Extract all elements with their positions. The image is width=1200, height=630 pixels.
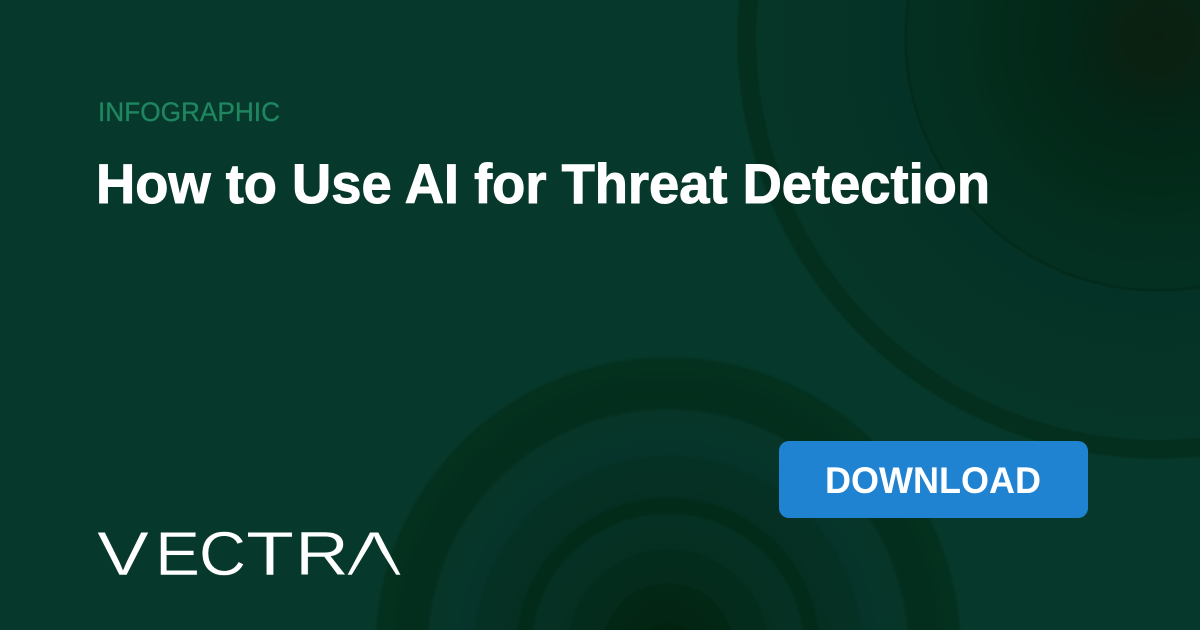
logo: Vectra: R — [295, 520, 349, 589]
decorative rings: upper right — [720, 0, 1200, 470]
eyebrow label: INFOGRAPHIC — [98, 97, 280, 127]
download button — [779, 441, 1088, 518]
logo: Vectra: A — [347, 520, 402, 589]
decorative rings: bottom center — [370, 350, 970, 630]
logo: Vectra: V — [97, 520, 150, 589]
logo: Vectra: T — [246, 520, 294, 589]
logo: Vectra — [98, 532, 401, 576]
download button: DOWNLOAD — [825, 460, 1041, 501]
logo: Vectra: E — [155, 520, 200, 589]
logo: Vectra: C — [199, 520, 246, 589]
title: How to Use AI for Threat Detection — [96, 152, 990, 215]
